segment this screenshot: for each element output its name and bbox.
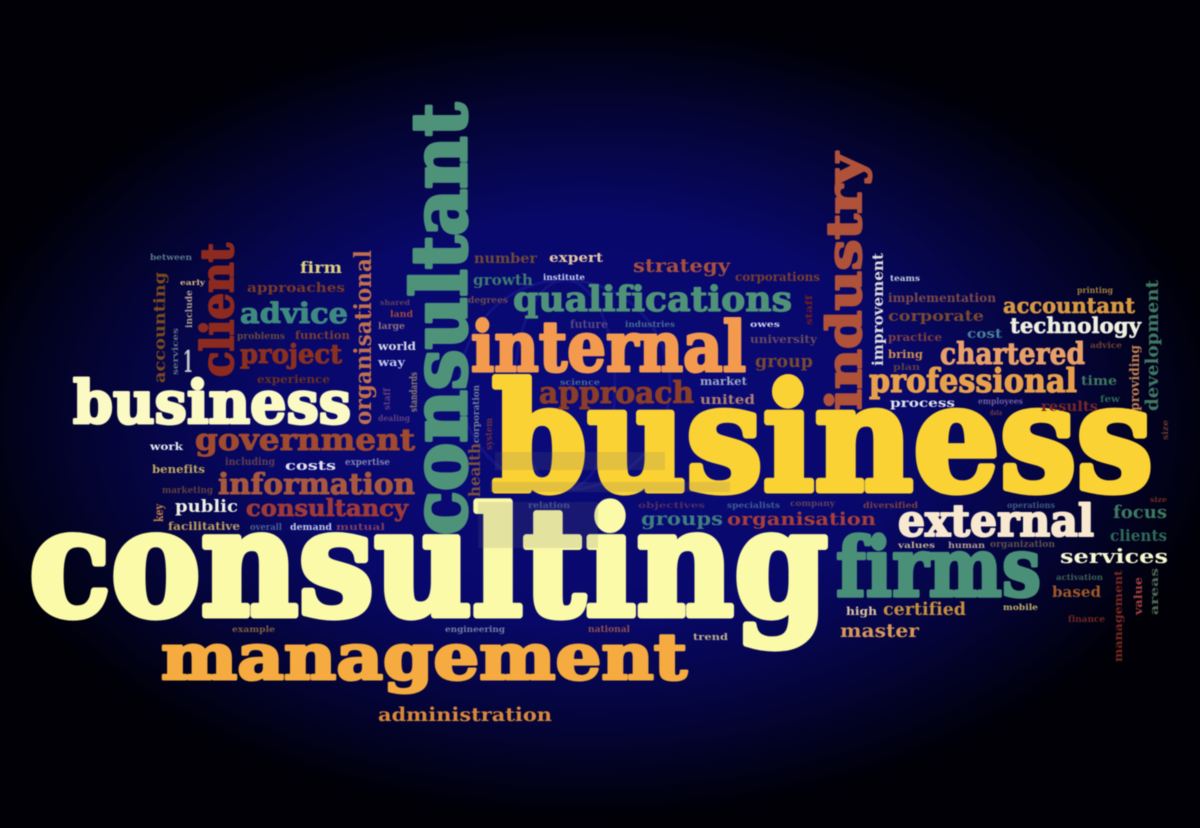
small words: left cluster: between — [150, 252, 192, 262]
word: technology: technology — [1010, 313, 1142, 338]
small vertical words: system — [485, 418, 495, 450]
small words: right cluster: based — [1052, 583, 1102, 601]
small words: right cluster: bring — [888, 348, 923, 361]
word: accounting (vertical): accounting — [150, 272, 169, 383]
small words: centre cluster: degrees — [468, 296, 508, 306]
word: services: services — [1060, 544, 1168, 568]
word: consultant (vertical): consultant — [395, 103, 484, 535]
word: project: project — [240, 340, 342, 370]
small words: right cluster: plan — [893, 363, 921, 373]
small words: right cluster: activation — [1056, 572, 1103, 582]
small words: centre cluster — [232, 251, 835, 643]
word: client (vertical): client — [191, 243, 244, 377]
small words: centre cluster: owes — [750, 319, 781, 329]
word: advice: advice — [240, 297, 348, 330]
small words: left cluster: land — [390, 310, 414, 320]
small vertical words: key — [152, 503, 166, 522]
word: industry (vertical): industry — [817, 151, 873, 410]
small words: right cluster: printing — [1077, 285, 1113, 295]
small words: left cluster: problems — [237, 332, 285, 342]
small words: right cluster: diversified — [863, 500, 918, 510]
small words: centre cluster: growth — [473, 271, 533, 289]
small words: centre cluster: relation — [528, 500, 570, 510]
small words: left cluster: facilitative — [168, 520, 240, 533]
small words: left cluster: way — [377, 356, 406, 369]
small words: centre cluster: institute — [543, 272, 585, 282]
small vertical words: corporation — [472, 385, 482, 443]
word: professional: professional — [869, 361, 1077, 400]
small words: right cluster: finance — [1068, 615, 1105, 625]
small words: centre cluster: national — [588, 625, 631, 635]
word: development (vertical): development — [1142, 279, 1163, 411]
small words: right cluster: organization — [990, 540, 1055, 550]
word: organisation: organisation — [727, 509, 876, 530]
word: master: master — [840, 620, 920, 642]
word: improvement (vertical): improvement — [869, 253, 887, 366]
small words: centre cluster: corporations — [735, 270, 820, 284]
small words: centre cluster: example — [232, 624, 275, 634]
small words: centre cluster: united — [700, 393, 755, 408]
small words: right cluster — [846, 273, 1168, 625]
small words: left cluster: approaches — [247, 281, 345, 296]
small words: centre cluster: university — [750, 333, 818, 346]
small words: left cluster: large — [378, 322, 405, 332]
small vertical words — [152, 290, 1170, 662]
small words: left cluster: costs — [285, 459, 336, 474]
small words: centre cluster: number — [474, 251, 538, 267]
small words: right cluster: teams — [890, 273, 921, 283]
word: external: external — [898, 496, 1094, 547]
small words: right cluster: few — [1100, 395, 1120, 405]
small words: right cluster: time — [1081, 374, 1117, 389]
small vertical words: value — [1132, 577, 1145, 616]
small words: left cluster: firm — [300, 258, 342, 277]
small words: left cluster: benefits — [152, 463, 205, 476]
small words: centre cluster: objectives — [638, 500, 706, 510]
word: consulting (large cream): consulting — [29, 476, 828, 651]
small words: right cluster: results — [1041, 399, 1098, 415]
small words: centre cluster: industries — [625, 319, 676, 329]
word: organisational (vertical): organisational — [350, 250, 377, 425]
word: strategy: strategy — [633, 255, 731, 277]
small words: right cluster: high — [846, 605, 877, 618]
small vertical words: size — [1160, 420, 1170, 440]
small words: left cluster: experience — [257, 373, 330, 386]
small vertical words: services — [170, 327, 180, 375]
small words: centre cluster: future — [570, 318, 608, 331]
small words: right cluster: implementation — [888, 291, 996, 305]
small words: centre cluster: trend — [693, 633, 729, 643]
small words: right cluster: practice — [888, 331, 942, 344]
word: providing (vertical): providing — [1128, 345, 1143, 411]
small words: centre cluster: company — [790, 498, 835, 508]
word: information: information — [218, 467, 415, 501]
small words: left cluster: early — [180, 278, 206, 287]
word: business (left): business — [73, 368, 351, 437]
word cloud — [29, 103, 1170, 726]
small words: centre cluster: group — [755, 351, 813, 372]
small words: right cluster: cost — [967, 327, 1002, 342]
small vertical words: areas — [1148, 568, 1161, 615]
small vertical words: include — [185, 290, 195, 328]
small words: left cluster: function — [295, 329, 350, 342]
small words: right cluster: focus — [1113, 502, 1167, 523]
small words: left cluster: including — [225, 457, 275, 468]
word: consultancy: consultancy — [246, 495, 409, 522]
word: business (large yellow): business — [492, 351, 1153, 525]
word: qualifications: qualifications — [513, 279, 792, 320]
small vertical words: staff — [805, 294, 815, 325]
small words: right cluster: corporate — [888, 307, 984, 325]
small words: right cluster: data — [990, 408, 1002, 417]
small words: left cluster: demand — [290, 523, 333, 533]
small vertical words: management — [1112, 569, 1125, 662]
small words: left cluster: public — [175, 497, 238, 517]
small words: centre cluster: market — [700, 375, 748, 388]
small words: centre cluster: expert — [549, 251, 603, 266]
word: administration: administration — [378, 704, 552, 726]
word: health (vertical): health — [465, 443, 484, 497]
small words: right cluster: values — [897, 540, 936, 550]
word: approach: approach — [539, 376, 694, 411]
word: management: management — [161, 620, 687, 695]
faint watermark over letters — [478, 452, 730, 548]
small words: centre cluster: science — [560, 377, 600, 387]
word: firms: firms — [836, 521, 1041, 616]
small words: right cluster: operations — [1007, 500, 1055, 510]
word: groups: groups — [641, 508, 723, 530]
small words: right cluster: employees — [978, 396, 1023, 406]
small words: right cluster: process — [890, 396, 955, 410]
small words: left cluster — [149, 252, 416, 533]
small words: left cluster: shared — [380, 298, 410, 307]
small words: centre cluster: specialists — [727, 500, 781, 510]
small words: right cluster: clients — [1110, 526, 1167, 545]
word: internal: internal — [471, 307, 746, 388]
small words: left cluster: expertise — [345, 458, 390, 468]
word: government: government — [195, 423, 415, 458]
small words: right cluster: size — [1150, 495, 1168, 504]
small words: centre cluster: engineering — [445, 624, 505, 634]
small vertical words: 1 — [183, 345, 193, 380]
small words: left cluster: dealing — [378, 413, 410, 423]
small words: left cluster: marketing — [162, 486, 214, 496]
small words: left cluster: mutual — [336, 523, 386, 533]
word: certified: certified — [883, 599, 966, 620]
word: chartered: chartered — [940, 337, 1085, 372]
small words: left cluster: work — [149, 442, 184, 453]
small words: right cluster: advice — [1090, 340, 1122, 350]
small vertical words: staff — [383, 387, 393, 410]
small words: right cluster: mobile — [1003, 602, 1038, 612]
small words: right cluster: human — [948, 540, 985, 550]
small words: left cluster: world — [377, 340, 416, 353]
small vertical words: standards — [409, 372, 420, 412]
faint globe watermark — [460, 280, 670, 490]
small words: left cluster: overall — [250, 523, 283, 533]
word: accountant: accountant — [1003, 293, 1135, 318]
